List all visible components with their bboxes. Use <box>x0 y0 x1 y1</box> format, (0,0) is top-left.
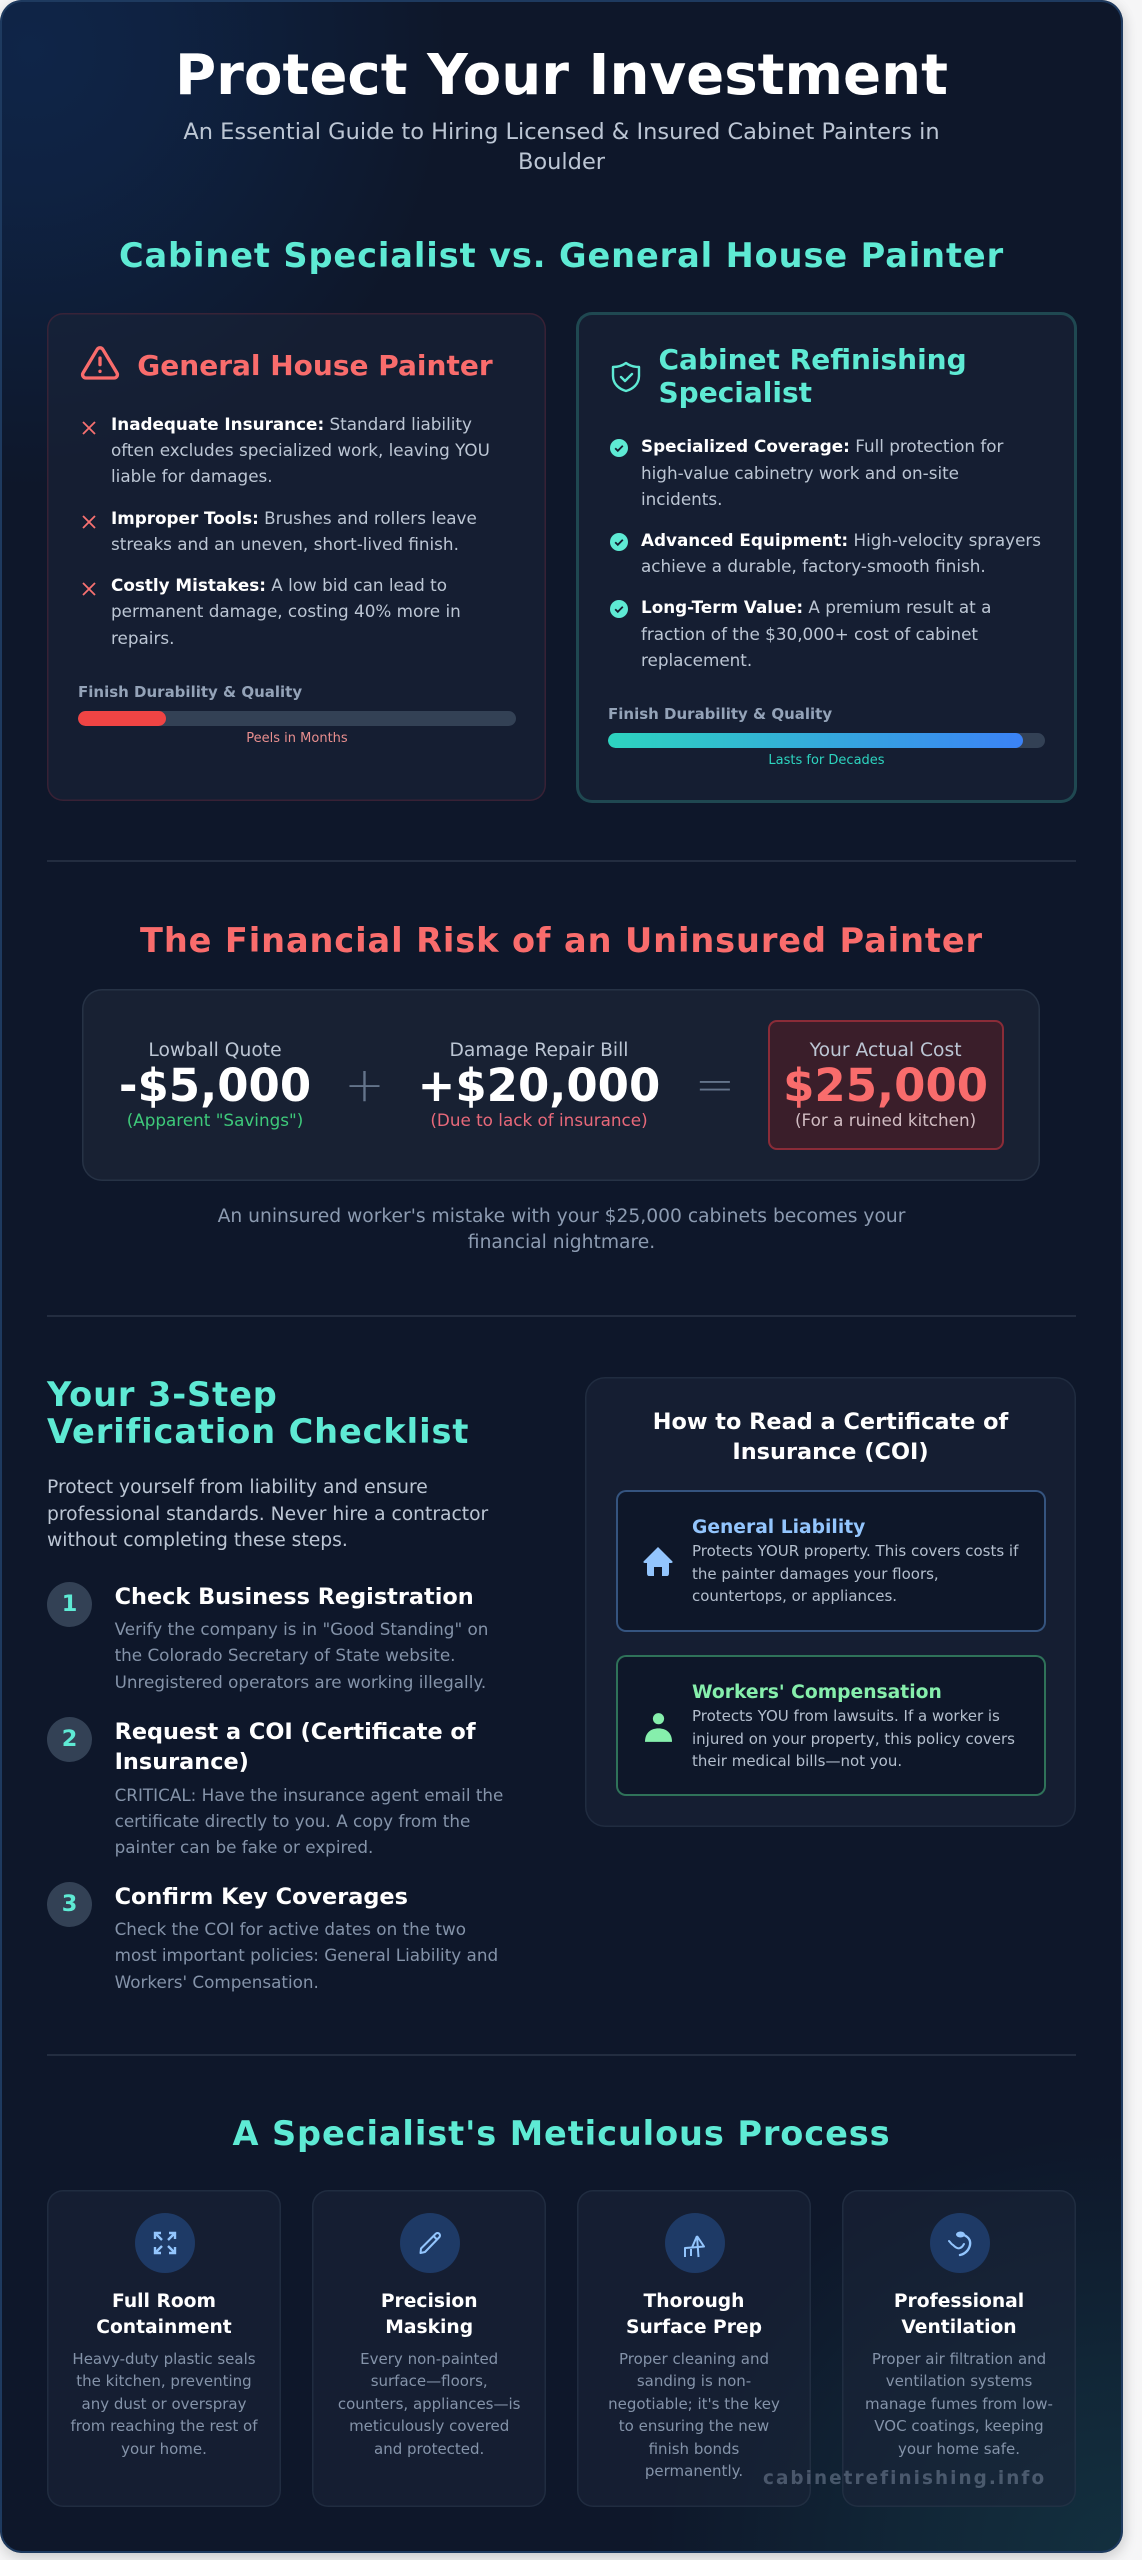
item text: Inadequate Insurance: Standard liability <box>111 414 472 434</box>
card description <box>47 2348 281 2460</box>
card description: VOC coatings, keeping <box>874 2417 1044 2435</box>
title: Protect Your Investment <box>175 43 948 108</box>
card title: Full Room <box>112 2291 216 2312</box>
caption: financial nightmare. <box>468 1232 655 1252</box>
watermark: cabinetrefinishing.info <box>763 2468 1046 2489</box>
icon: ventilation <box>930 2213 990 2273</box>
step number: 2 <box>62 1726 77 1752</box>
step description <box>114 1619 488 1692</box>
item text: fraction of the $30,000+ cost of cabinet <box>641 624 978 644</box>
item text: incidents. <box>641 489 722 509</box>
card description: the kitchen, preventing <box>76 2372 252 2390</box>
card description <box>842 2348 1076 2460</box>
intro text: professional standards. Never hire a contractor <box>47 1504 488 1525</box>
item text <box>641 436 1004 509</box>
card description: and protected. <box>374 2440 484 2458</box>
list item: improper tools <box>82 508 477 554</box>
panel: how to read a COI <box>585 1377 1076 1827</box>
item text: repairs. <box>111 628 174 648</box>
meter caption: Lasts for Decades <box>768 753 885 768</box>
callout label: Your Actual Cost <box>810 1040 962 1061</box>
card description: counters, appliances—is <box>338 2395 520 2413</box>
coverage description: the painter damages your floors, <box>692 1565 939 1583</box>
item text: Costly Mistakes: A low bid can lead to <box>111 575 447 595</box>
card title: Containment <box>96 2317 232 2338</box>
card description: permanently. <box>645 2462 743 2480</box>
step description: the Colorado Secretary of State website. <box>115 1645 456 1665</box>
term amount: +$20,000 <box>418 1059 660 1112</box>
step description: Verify the company is in "Good Standing" on <box>115 1619 488 1639</box>
item text: liable for damages. <box>111 466 273 486</box>
step title: Request a COI (Certificate of <box>115 1719 476 1745</box>
item text <box>641 597 991 670</box>
list item: inadequate insurance <box>82 414 490 486</box>
card heading: Cabinet Refinishing <box>658 343 967 376</box>
card description: your home. <box>121 2440 207 2458</box>
card title <box>842 2289 1076 2342</box>
step number <box>47 1882 92 1927</box>
operator: equals: = <box>695 1057 735 1113</box>
panel: cabinet refinishing specialist <box>576 312 1077 802</box>
item text: Advanced Equipment: High-velocity sprayers <box>641 530 1041 550</box>
list item: long-term value <box>610 597 991 670</box>
durability meter: low <box>78 683 516 746</box>
heading: comparison: Cabinet Specialist vs. General House Painter <box>119 236 1004 275</box>
item text: streaks and an uneven, short-lived finish. <box>111 534 459 554</box>
heading: process: A Specialist's Meticulous Process <box>232 2114 891 2153</box>
step 2 <box>47 1717 503 1857</box>
step 3 <box>47 1882 498 1992</box>
equation term: damage repair bill <box>418 1040 660 1130</box>
heading: checklist: Verification Checklist <box>47 1412 469 1451</box>
icon: house <box>643 1546 673 1576</box>
coverage description <box>692 1705 1015 1773</box>
process card: masking <box>312 2190 546 2507</box>
step number <box>47 1582 92 1627</box>
icon: warning triangle <box>80 346 120 380</box>
card heading: General House Painter <box>137 349 493 382</box>
step title: Insurance) <box>115 1749 249 1775</box>
step number: 3 <box>62 1891 77 1917</box>
heading: financial risk: The Financial Risk of an Uninsured Painter <box>140 921 983 960</box>
card description: sanding is non- <box>637 2372 751 2390</box>
section: comparison <box>47 236 1077 803</box>
card title: Precision <box>381 2291 478 2312</box>
caption <box>218 1206 906 1252</box>
card title: Surface Prep <box>626 2317 762 2338</box>
card description: finish bonds <box>649 2440 739 2458</box>
coverage description: injured on your property, this policy covers <box>692 1730 1015 1748</box>
icon: x mark <box>82 515 96 529</box>
term note: (Apparent "Savings") <box>127 1110 303 1130</box>
item text: achieve a durable, factory-smooth finish. <box>641 556 986 576</box>
step description: Unregistered operators are working illegally. <box>115 1672 486 1692</box>
icon: person <box>645 1713 672 1742</box>
step number <box>47 1717 92 1762</box>
coverage box: workers compensation <box>616 1655 1046 1796</box>
step 1 <box>47 1582 488 1692</box>
list item: advanced equipment <box>610 530 1041 576</box>
item text: often excludes specialized work, leaving YOU <box>111 440 490 460</box>
panel heading: Insurance (COI) <box>732 1439 929 1465</box>
coverage description: their medical bills—not you. <box>692 1752 902 1770</box>
card description: manage fumes from low- <box>865 2395 1053 2413</box>
card description: meticulously covered <box>349 2417 509 2435</box>
icon: check circle <box>610 600 628 618</box>
icon: x mark <box>82 582 96 596</box>
card description <box>312 2348 546 2460</box>
item text <box>111 575 461 648</box>
step title: Check Business Registration <box>115 1584 474 1610</box>
panel: cost equation <box>82 989 1040 1181</box>
header <box>175 43 948 175</box>
bar: 95 percent <box>608 733 1045 748</box>
item text: Long-Term Value: A premium result at a <box>641 597 991 617</box>
card description: surface—floors, <box>371 2372 488 2390</box>
card description: from reaching the rest of <box>70 2417 258 2435</box>
list item: specialized coverage <box>610 436 1004 509</box>
item text: replacement. <box>641 650 752 670</box>
step description: Check the COI for active dates on the two <box>115 1919 466 1939</box>
term note: (Due to lack of insurance) <box>430 1110 648 1130</box>
icon: shield check <box>612 362 640 392</box>
card description: Proper air filtration and <box>872 2350 1046 2368</box>
item text: permanent damage, costing 40% more in <box>111 601 461 621</box>
step description: painter can be fake or expired. <box>115 1837 373 1857</box>
section: meticulous process <box>47 2108 1077 2508</box>
icon: check circle <box>610 533 628 551</box>
panel: general house painter <box>47 313 546 801</box>
meter caption: Peels in Months <box>246 730 348 746</box>
card title <box>47 2289 281 2342</box>
card title <box>312 2289 546 2342</box>
process card: containment <box>47 2190 281 2507</box>
intro text: Protect yourself from liability and ensure <box>47 1477 428 1498</box>
card description: to ensuring the new <box>619 2417 769 2435</box>
card title: Professional <box>894 2291 1024 2312</box>
meter label: Finish Durability & Quality <box>608 705 832 723</box>
icon: x mark <box>82 421 96 435</box>
bar: 20 percent <box>78 711 516 726</box>
coverage title: General Liability <box>692 1517 865 1538</box>
intro text <box>47 1477 488 1551</box>
coverage title: Workers' Compensation <box>692 1682 942 1703</box>
coverage box: general liability <box>616 1490 1046 1632</box>
step description <box>115 1784 503 1857</box>
icon: pencil <box>400 2213 460 2273</box>
step description: CRITICAL: Have the insurance agent email the <box>115 1784 503 1804</box>
operator: plus: + <box>344 1057 385 1113</box>
intro text: without completing these steps. <box>47 1530 348 1551</box>
coverage description: countertops, or appliances. <box>692 1587 897 1605</box>
callout: actual cost <box>768 1020 1004 1150</box>
panel heading <box>585 1407 1076 1467</box>
card description: negotiable; it's the key <box>608 2395 780 2413</box>
card title: Thorough <box>644 2291 744 2312</box>
step title: Confirm Key Coverages <box>115 1884 408 1910</box>
callout amount: $25,000 <box>783 1059 988 1112</box>
icon: check circle <box>610 439 628 457</box>
step description: most important policies: General Liability and <box>115 1945 498 1965</box>
heading: checklist <box>46 1375 469 1451</box>
card description: any dust or overspray <box>82 2395 246 2413</box>
panel heading: How to Read a Certificate of <box>653 1409 1008 1435</box>
meter label: Finish Durability & Quality <box>78 683 302 701</box>
coverage description <box>692 1540 1018 1608</box>
card heading: Specialist <box>658 376 812 409</box>
subtitle <box>183 119 940 175</box>
card title <box>577 2289 811 2342</box>
item text <box>111 414 490 486</box>
subtitle: Boulder <box>518 149 605 175</box>
step number: 1 <box>62 1591 77 1617</box>
list item: costly mistakes <box>82 575 461 648</box>
step description: Workers' Compensation. <box>115 1972 319 1992</box>
callout note: (For a ruined kitchen) <box>795 1110 976 1130</box>
heading: checklist: Your 3-Step <box>47 1375 278 1414</box>
section: financial risk <box>82 921 1040 1252</box>
step description: certificate directly to you. A copy from the <box>115 1811 470 1831</box>
card description: ventilation systems <box>886 2372 1032 2390</box>
process card: ventilation <box>842 2190 1076 2507</box>
item text: Specialized Coverage: Full protection for <box>641 436 1003 456</box>
coverage description: Protects YOUR property. This covers costs if <box>692 1542 1018 1560</box>
card description: Heavy-duty plastic seals <box>72 2350 256 2368</box>
section: verification checklist <box>46 1375 503 1992</box>
card description <box>577 2348 811 2483</box>
item text: high-value cabinetry work and on-site <box>641 463 959 483</box>
item text <box>111 508 477 554</box>
process card: surface prep <box>577 2190 811 2507</box>
card title: Masking <box>385 2317 473 2338</box>
card description: Every non-painted <box>360 2350 498 2368</box>
card description: Proper cleaning and <box>619 2350 769 2368</box>
caption: An uninsured worker's mistake with your $25,000 cabinets becomes your <box>218 1206 905 1226</box>
card heading <box>658 343 967 409</box>
term label: Lowball Quote <box>148 1040 282 1061</box>
icon: sanding tool <box>665 2213 725 2273</box>
coverage description: Protects YOU from lawsuits. If a worker is <box>692 1707 1000 1725</box>
card description: your home safe. <box>898 2440 1020 2458</box>
term label: Damage Repair Bill <box>450 1040 628 1061</box>
step description <box>115 1919 498 1992</box>
item text: Improper Tools: Brushes and rollers leave <box>111 508 477 528</box>
durability meter: high <box>608 705 1045 768</box>
item text <box>641 530 1041 576</box>
step title <box>115 1719 476 1775</box>
subtitle: An Essential Guide to Hiring Licensed & Insured Cabinet Painters in <box>183 119 940 145</box>
card title: Ventilation <box>901 2317 1017 2338</box>
equation term: lowball quote <box>119 1040 311 1130</box>
term amount: -$5,000 <box>119 1059 311 1112</box>
icon: expand arrows <box>135 2213 195 2273</box>
